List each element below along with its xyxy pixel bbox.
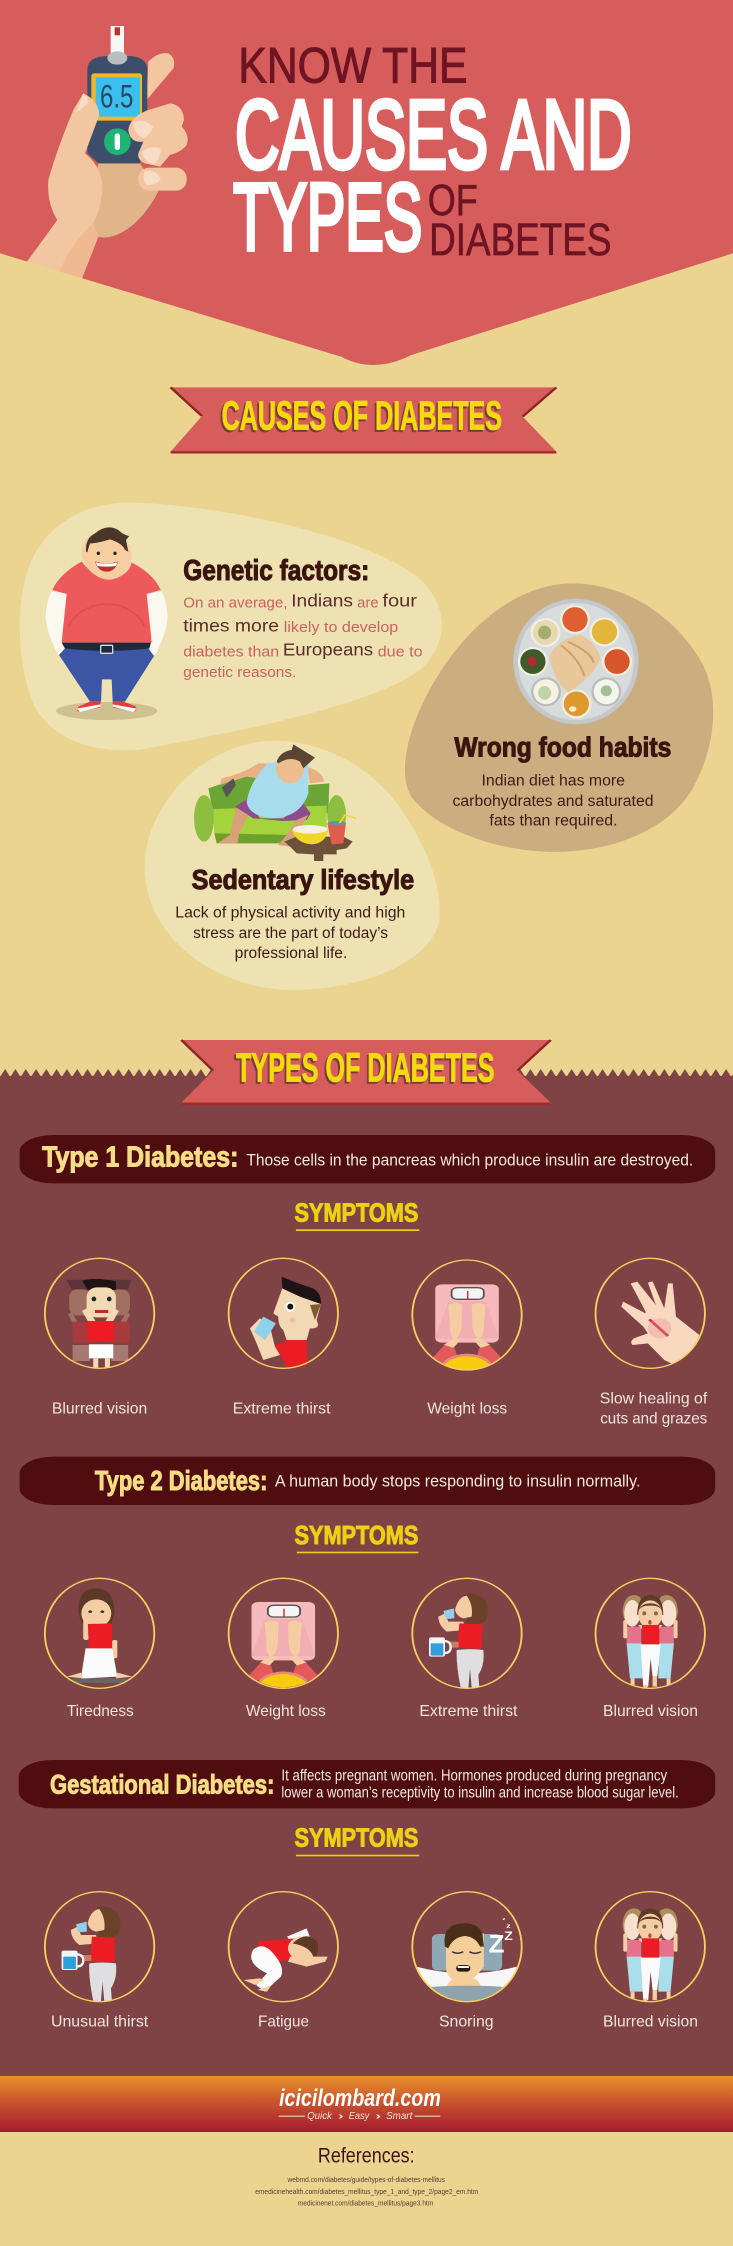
- snoring letters: Z: [489, 1930, 504, 1958]
- panel: causes: [20, 502, 713, 990]
- logo band: Easy: [349, 2110, 370, 2121]
- symptom: slow healing: [596, 1258, 708, 1427]
- symptom: weight loss: [229, 1578, 338, 1720]
- panel: genetic factors: [20, 502, 442, 750]
- snoring letters: [489, 1918, 513, 1958]
- definition pill: Gestational Diabetes:: [50, 1770, 274, 1799]
- panel: type 2 diabetes: [20, 1457, 715, 1720]
- icon: overweight man: [46, 527, 168, 720]
- panel: footer: [0, 2076, 733, 2207]
- title: KNOW THE: [238, 37, 467, 93]
- symptom: weight loss: [412, 1260, 522, 1417]
- definition pill: [20, 1135, 715, 1183]
- heading banner: causes of diabetes: [171, 387, 556, 452]
- symptom: unusual thirst: [45, 1892, 154, 2031]
- body text: On an average,: [183, 594, 287, 611]
- body text: Indians: [291, 592, 353, 611]
- symptom: snoring: [412, 1892, 522, 2031]
- body text: diabetes than: [183, 643, 279, 660]
- title: OF: [428, 176, 478, 225]
- envelope flap: [0, 253, 733, 440]
- symptoms heading: SYMPTOMS: [295, 1520, 418, 1550]
- logo band: ›: [375, 2110, 381, 2121]
- logo band: [0, 2076, 733, 2132]
- definition pill: [19, 1760, 715, 1808]
- title: [233, 37, 632, 270]
- logo band: Quick: [307, 2110, 333, 2121]
- references: [255, 2143, 478, 2207]
- symptom: tiredness: Tiredness: [67, 1702, 134, 1720]
- panel: gestational diabetes: [19, 1760, 715, 2031]
- meter reading: 6.5: [100, 78, 133, 114]
- symptoms heading: [295, 1520, 418, 1553]
- panel: wrong food habits: [405, 583, 713, 852]
- symptom: weight loss: Weight loss: [427, 1399, 507, 1417]
- logo band: icicilombard.com: [279, 2085, 441, 2112]
- logo band: Smart: [386, 2110, 413, 2121]
- symptom: blurred vision: [596, 1578, 705, 1720]
- symptom: snoring: Snoring: [439, 2013, 494, 2031]
- body text: stress are the part of today’s: [193, 925, 388, 942]
- body text: genetic reasons.: [183, 664, 296, 680]
- definition pill: Type 2 Diabetes:: [95, 1466, 267, 1497]
- body text: times more: [183, 616, 279, 636]
- panel: types background: [0, 1076, 733, 2077]
- icon: man on sofa: [194, 744, 356, 861]
- references: emedicinehealth.com/diabetes_mellitus_type_1_and_type_2/page2_em.htm: [255, 2187, 478, 2196]
- symptom: weight loss: Weight loss: [246, 1702, 326, 1720]
- symptom: extreme thirst: Extreme thirst: [233, 1399, 331, 1417]
- snoring letters: z: [506, 1922, 511, 1930]
- panel: sedentary lifestyle: [145, 741, 440, 990]
- definition pill: Type 1 Diabetes:: [42, 1141, 238, 1173]
- definition pill: [20, 1457, 715, 1505]
- body text: are: [357, 594, 379, 611]
- body text: likely to develop: [284, 618, 398, 635]
- heading: Genetic factors:: [183, 555, 369, 587]
- panel: type 1 diabetes: [20, 1040, 715, 1427]
- references: webmd.com/diabetes/guide/types-of-diabetes-mellitus: [287, 2175, 445, 2184]
- symptom: blurred vision: [45, 1258, 154, 1417]
- heading: Sedentary lifestyle: [192, 864, 414, 895]
- symptom: blurred vision: [596, 1892, 705, 2031]
- symptoms heading: SYMPTOMS: [295, 1198, 418, 1227]
- symptom: extreme thirst: [412, 1578, 522, 1720]
- references: medicinenet.com/diabetes_mellitus/page3.htm: [298, 2199, 433, 2207]
- symptoms heading: [295, 1823, 419, 1856]
- symptom: extreme thirst: Extreme thirst: [419, 1702, 518, 1720]
- panel: header: [0, 0, 733, 452]
- title: TYPES: [233, 163, 422, 270]
- body text: [453, 772, 654, 830]
- icon: hand holding glucose meter: [23, 26, 188, 283]
- symptom: fatigue: Fatigue: [258, 2013, 309, 2031]
- body text: Indian diet has more: [481, 772, 625, 790]
- snoring letters: z: [503, 1918, 506, 1922]
- symptoms heading: SYMPTOMS: [295, 1823, 418, 1852]
- body text: Lack of physical activity and high: [175, 904, 405, 922]
- logo band: ›: [338, 2110, 344, 2121]
- symptom: tiredness: [45, 1578, 154, 1720]
- body text: fats than required.: [489, 812, 618, 830]
- symptom: blurred vision: Blurred vision: [52, 1399, 147, 1417]
- symptoms heading: [295, 1198, 419, 1231]
- body text: [183, 592, 423, 680]
- body text: professional life.: [235, 945, 347, 962]
- snoring letters: Z: [504, 1930, 513, 1943]
- symptom: unusual thirst: Unusual thirst: [51, 2013, 149, 2031]
- heading banner: types of diabetes: [181, 1040, 551, 1104]
- symptom: fatigue: [229, 1892, 338, 2031]
- body text: Europeans: [283, 641, 373, 660]
- body text: [175, 904, 405, 962]
- body text: due to: [378, 643, 423, 660]
- body text: four: [382, 592, 417, 611]
- symptom: extreme thirst: [229, 1258, 338, 1417]
- icon: food plate: [513, 599, 639, 724]
- body text: carbohydrates and saturated: [453, 792, 654, 810]
- references: References:: [318, 2143, 415, 2168]
